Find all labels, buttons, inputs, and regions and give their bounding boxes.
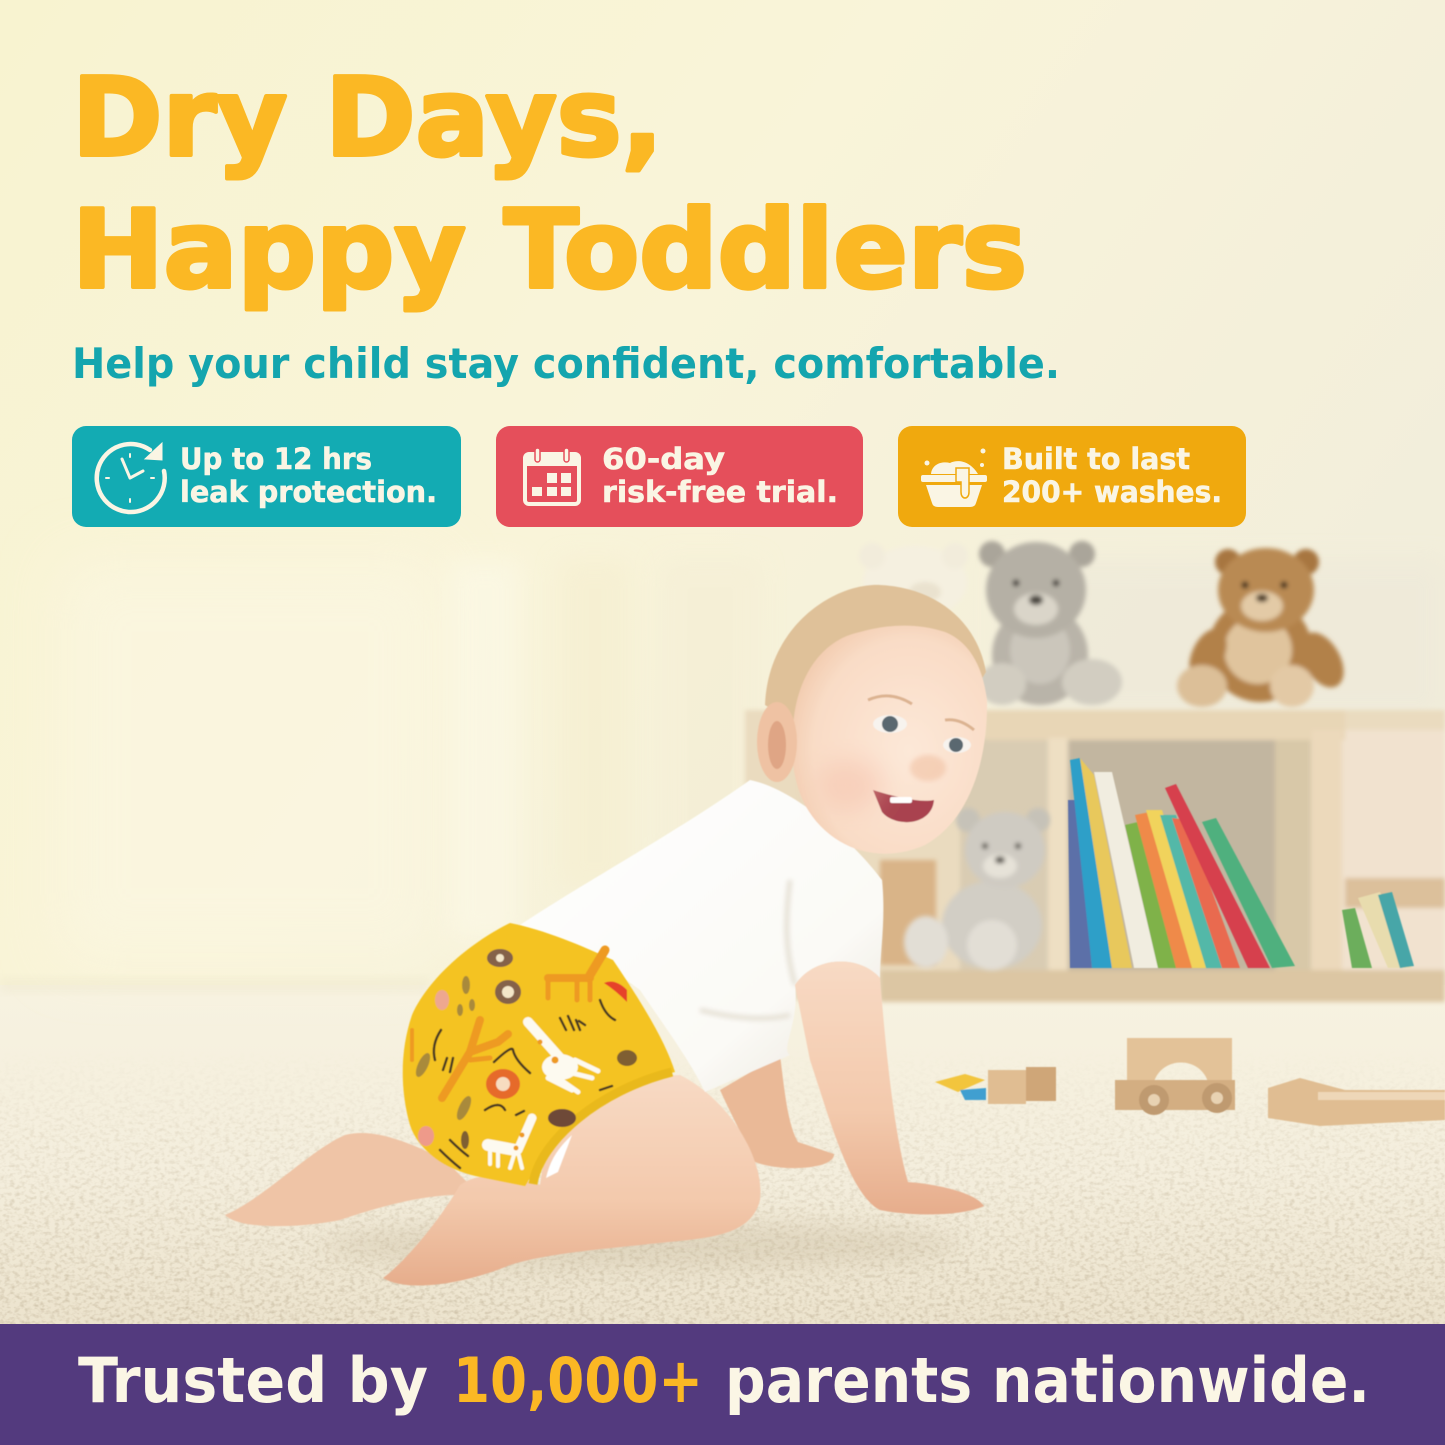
baby: shirt sleeve fold <box>700 880 795 1018</box>
badge text: leak protection. <box>180 475 437 509</box>
diaper: leaf prints <box>413 976 637 1149</box>
badge text: Up to 12 hrs <box>180 442 372 476</box>
books <box>1068 758 1414 968</box>
heading <box>72 56 1027 313</box>
badge text: Built to last <box>1002 442 1190 476</box>
diaper: white giraffe <box>528 1022 598 1092</box>
icon: clock <box>97 443 165 512</box>
diaper: dark squiggles <box>434 1000 615 1168</box>
baby: smile <box>873 790 934 822</box>
toy: wooden box on shelf <box>880 860 936 965</box>
baby: near leg and foot <box>383 1075 760 1286</box>
banner text: 10,000+ <box>453 1344 703 1417</box>
heading: Happy Toddlers <box>72 188 1027 313</box>
baby: eyes <box>873 715 971 753</box>
teddy bear: white, faint <box>859 543 968 618</box>
baby: far leg and foot <box>225 1133 480 1226</box>
diaper: orange giraffes <box>412 950 605 1098</box>
baby: nose shading <box>910 755 946 781</box>
teddy bear: brown <box>1177 548 1353 707</box>
bottom trust banner <box>0 1324 1445 1445</box>
wooden toys on the carpet <box>935 1038 1445 1126</box>
diaper: flower prints <box>418 949 627 1146</box>
patterned yellow diaper <box>403 923 675 1186</box>
badge text <box>1002 442 1222 509</box>
subheading: Help your child stay confident, comfortable. <box>72 339 1060 388</box>
banner text <box>78 1344 1370 1417</box>
badge text: 60-day <box>602 442 725 476</box>
baby: shirt <box>520 780 883 1092</box>
icon: calendar <box>525 448 579 504</box>
teddy bear: grey on shelf <box>904 808 1050 970</box>
baby: ear <box>757 702 797 782</box>
badge text: 200+ washes. <box>1002 475 1222 509</box>
badge: leak protection <box>72 426 461 527</box>
baby: near arm <box>795 962 984 1214</box>
baby: hair and skull <box>765 585 986 720</box>
teddy bear: grey <box>978 541 1122 705</box>
banner text: parents nationwide. <box>725 1344 1370 1417</box>
baby: eyebrows and nose <box>868 696 974 730</box>
badge text <box>602 442 838 509</box>
icon: wash basin <box>921 448 987 507</box>
photo background: nursery room <box>0 564 1445 1324</box>
diaper: small white giraffe <box>488 1118 532 1168</box>
bookshelf <box>745 710 1445 1002</box>
badge: washes <box>898 426 1246 527</box>
banner text: Trusted by <box>78 1344 428 1417</box>
badge: risk-free trial <box>496 426 863 527</box>
baby <box>225 585 987 1286</box>
badge text: risk-free trial. <box>602 475 838 509</box>
baby: contact shadow <box>320 1221 960 1269</box>
baby: cheek blush <box>818 759 882 811</box>
baby: far arm <box>720 1055 834 1168</box>
baby: head <box>792 626 987 854</box>
badge text <box>180 442 437 509</box>
heading: Dry Days, <box>72 56 663 181</box>
